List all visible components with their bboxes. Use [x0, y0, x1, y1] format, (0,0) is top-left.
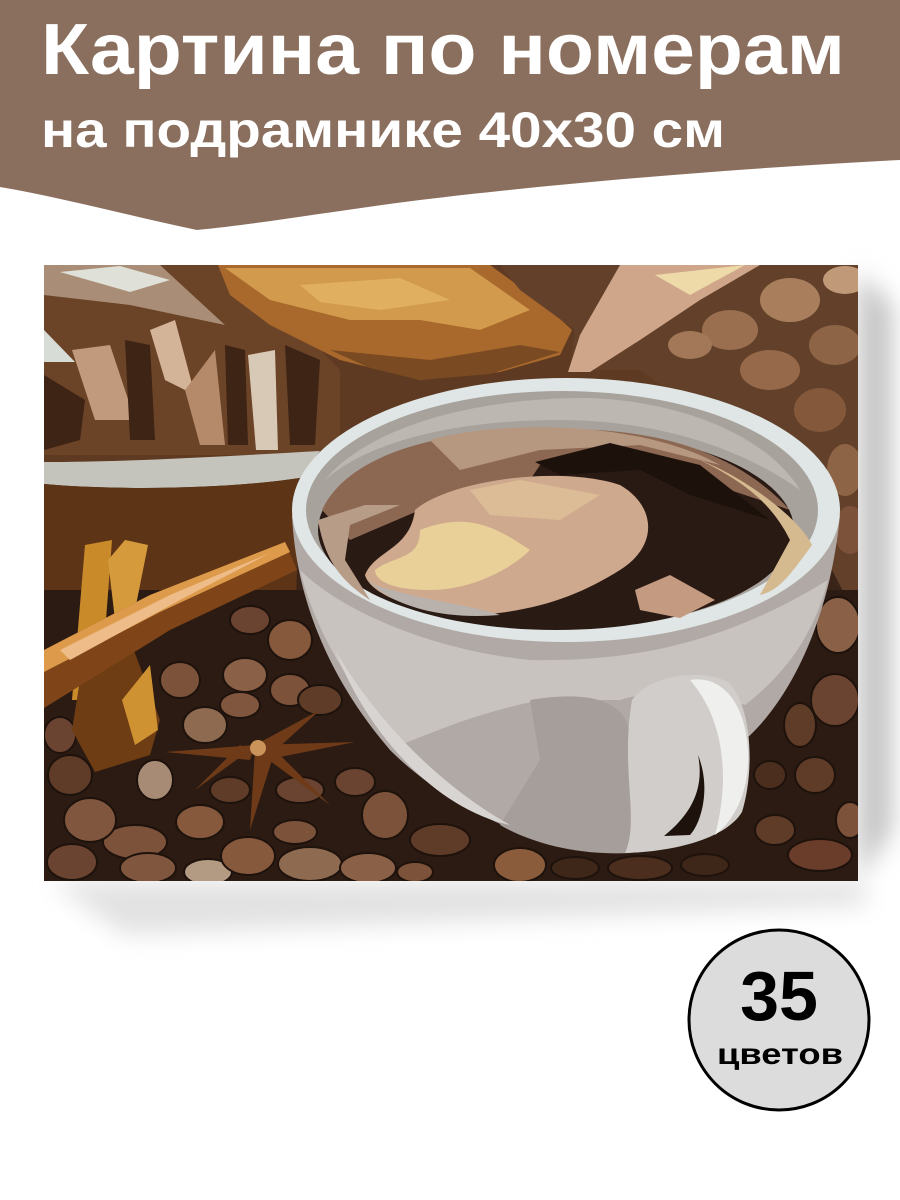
- number: 35: [740, 957, 818, 1035]
- foam: [365, 476, 648, 615]
- banner: [0, 0, 900, 230]
- cup: [292, 378, 840, 853]
- cup body: [292, 515, 840, 853]
- badge: 35 colours: [689, 930, 869, 1110]
- painting: coffee cup: [44, 265, 867, 885]
- title: Картина по номерам: [41, 10, 845, 90]
- right beans blur: [514, 282, 858, 590]
- subtitle: на подрамнике 40х30 см: [41, 102, 725, 158]
- cinnamon sticks: [44, 540, 297, 772]
- coffee beans: [44, 597, 864, 885]
- cup rim: [292, 378, 840, 642]
- background: upper blurred area: [44, 265, 867, 620]
- coffee surface: [318, 430, 794, 630]
- star anise: [165, 710, 355, 830]
- lower table: [44, 590, 858, 881]
- plate: [44, 451, 320, 488]
- pastry: [218, 265, 572, 380]
- canvas shadow: [50, 272, 892, 935]
- badge label: цветов: [717, 1038, 843, 1071]
- cup handle: [625, 675, 750, 853]
- cup inner wall: [306, 391, 818, 629]
